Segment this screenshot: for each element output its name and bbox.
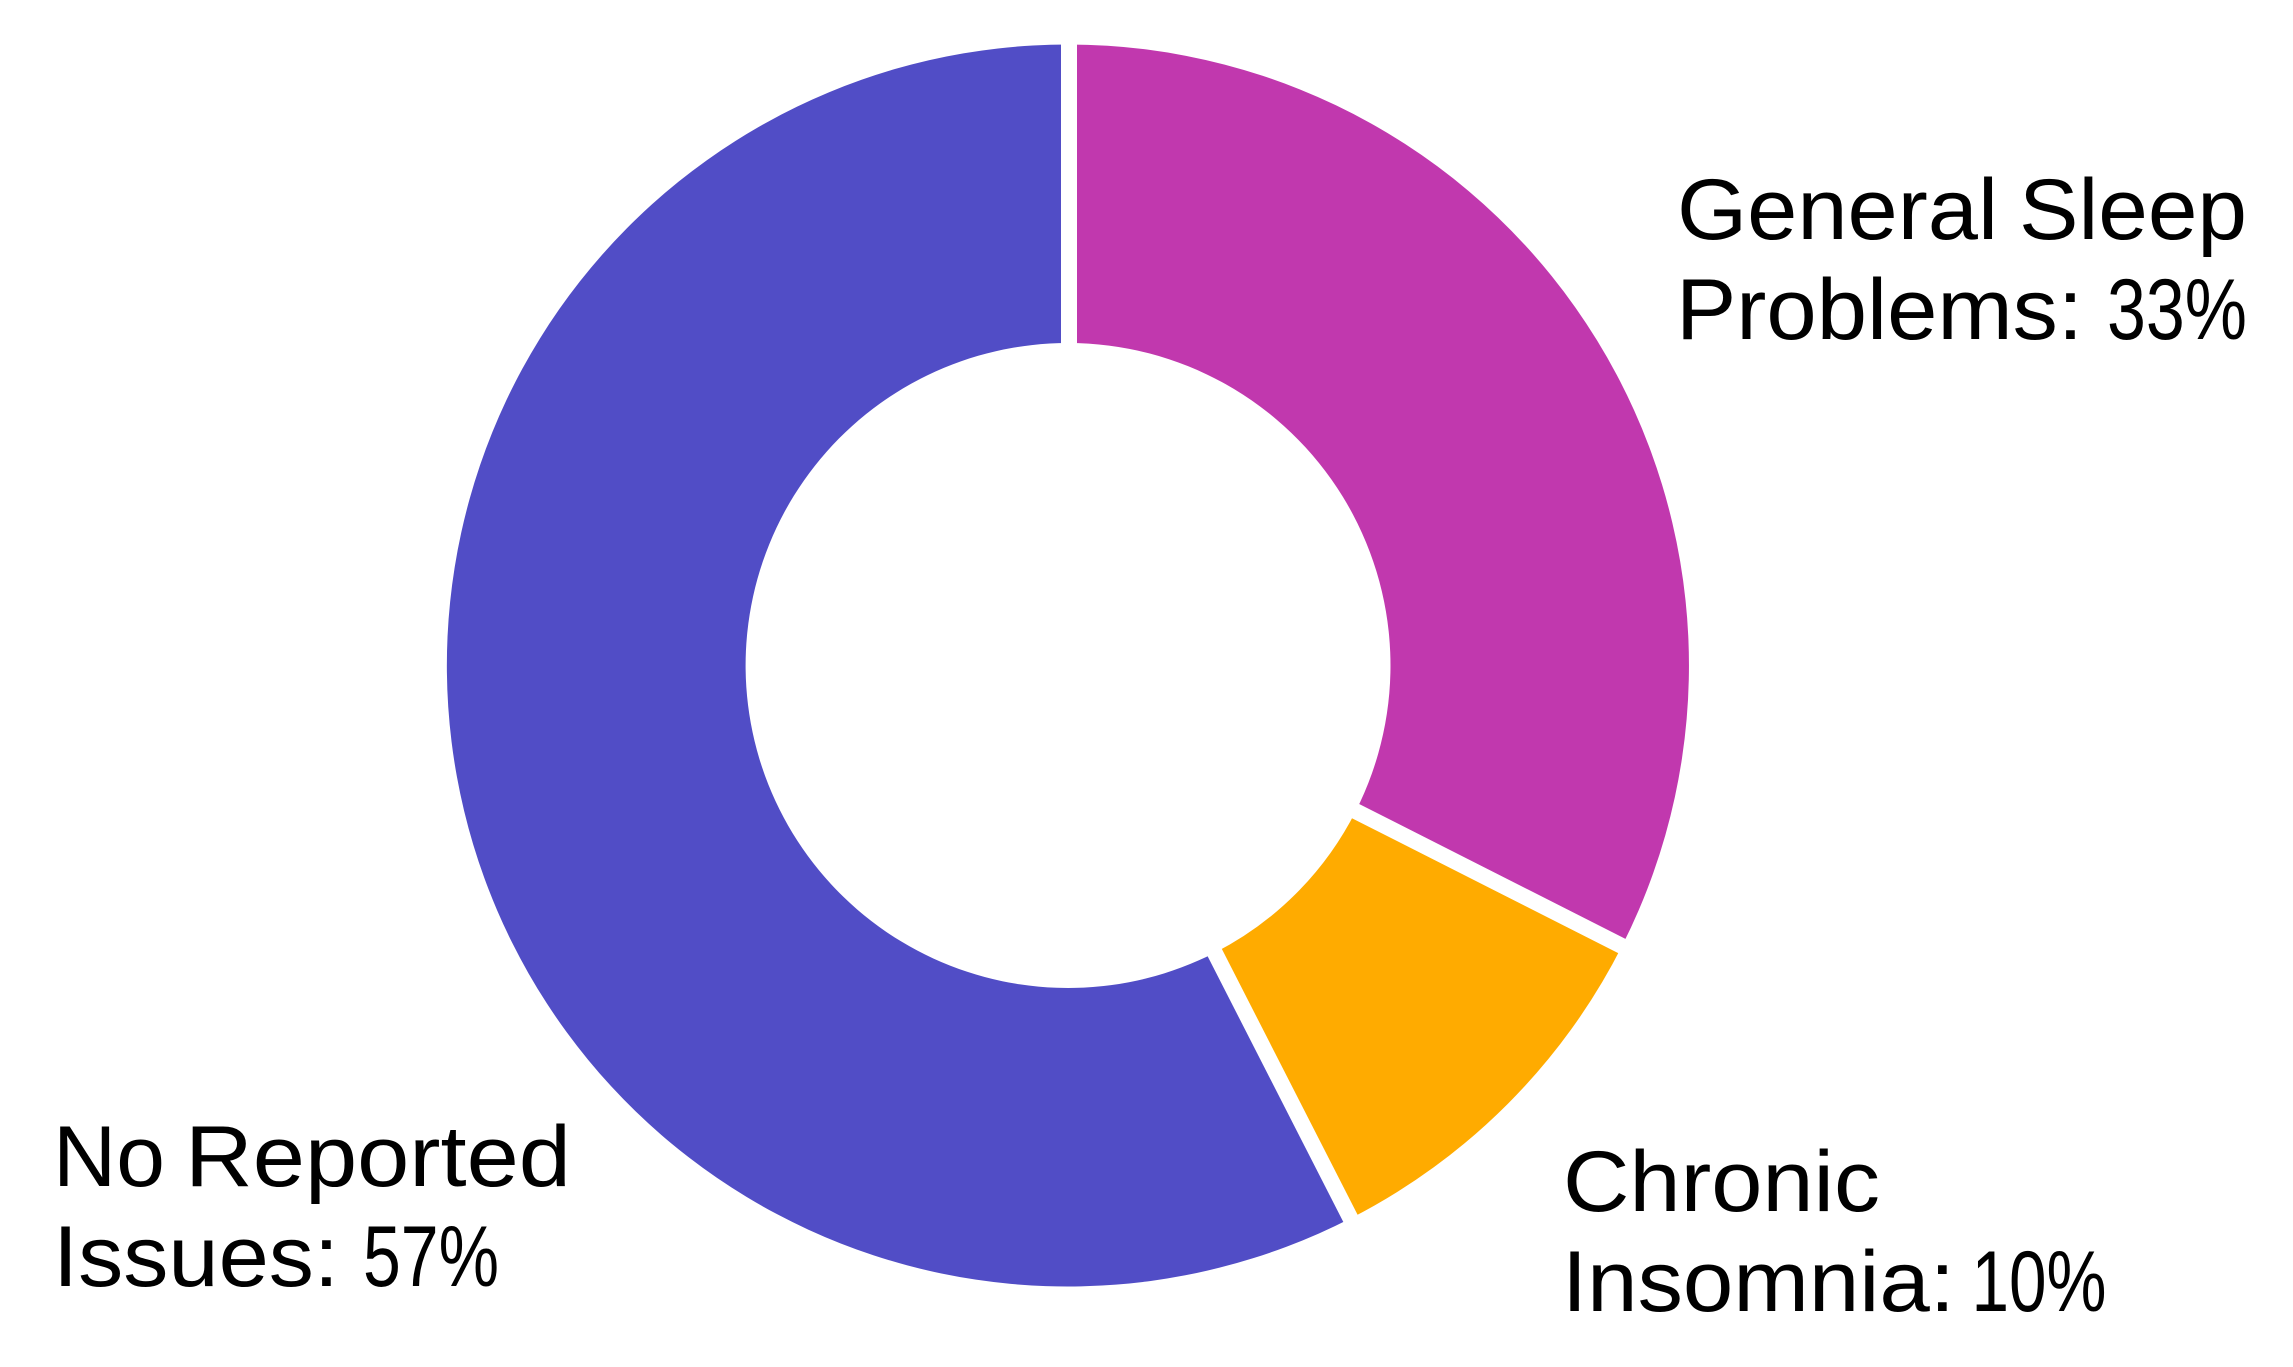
segment: General Sleep Problems 33% xyxy=(1068,44,1689,946)
label: General Sleep Problems 33%: General xyxy=(1677,162,1998,258)
label: Chronic Insomnia 10% xyxy=(1562,1134,2106,1330)
label: No Reported Issues 57%: Reported xyxy=(185,1109,571,1205)
label: Chronic Insomnia 10%: Chronic xyxy=(1563,1134,1880,1230)
segment: Chronic Insomnia 10% xyxy=(1215,811,1622,1218)
label: No Reported Issues 57%: 57% xyxy=(363,1209,499,1305)
segment: No Reported Issues 57% xyxy=(447,44,1351,1286)
label: No Reported Issues 57% xyxy=(53,1109,571,1305)
label: Chronic Insomnia 10%: Insomnia: xyxy=(1562,1234,1955,1330)
label: No Reported Issues 57%: Issues: xyxy=(53,1209,339,1305)
label: General Sleep Problems 33%: Sleep xyxy=(2019,162,2247,258)
label: General Sleep Problems 33%: Problems: xyxy=(1676,262,2083,358)
label: General Sleep Problems 33% xyxy=(1676,162,2247,358)
label: No Reported Issues 57%: No xyxy=(53,1109,165,1205)
label: General Sleep Problems 33%: 33% xyxy=(2107,262,2247,358)
label: Chronic Insomnia 10%: 10% xyxy=(1972,1234,2106,1330)
